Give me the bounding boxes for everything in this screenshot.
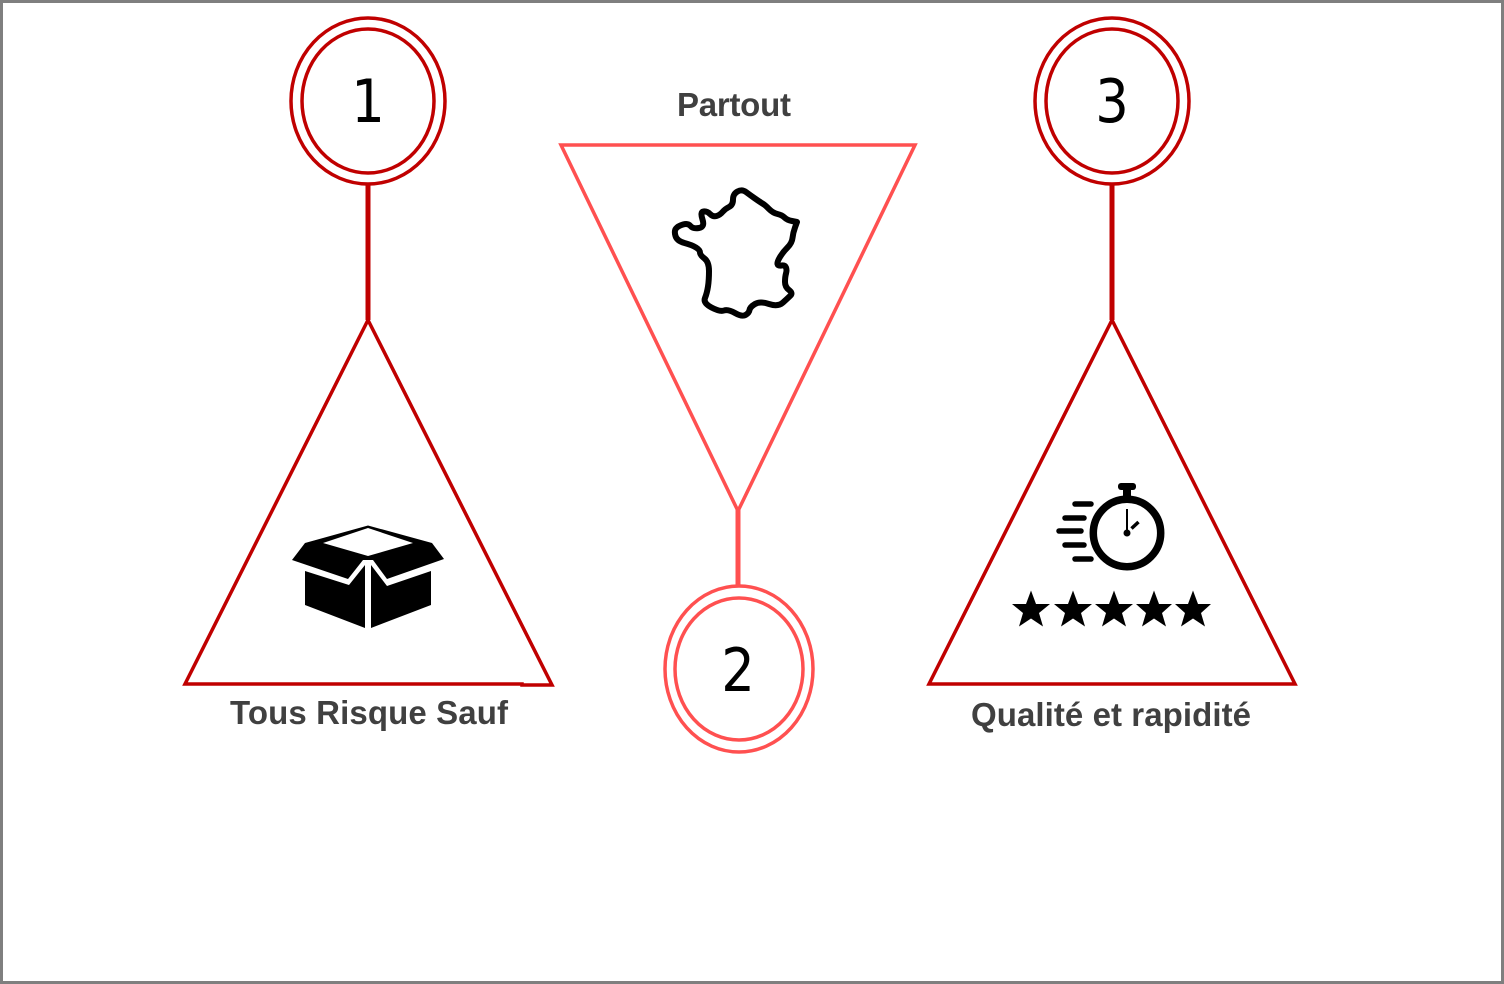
- icon: map of France: [675, 190, 797, 316]
- step 1 label: Tous Risque Sauf: [230, 694, 509, 731]
- panel: step 3: [929, 18, 1295, 733]
- step 2 connector: [736, 510, 740, 587]
- panel: step 2: [561, 86, 915, 752]
- icon: five stars: [1012, 590, 1211, 626]
- step 3 badge: [1035, 18, 1189, 184]
- icon: stopwatch: [1059, 483, 1161, 567]
- step 2 badge: 2: [721, 637, 755, 706]
- panel: step 1: [185, 18, 552, 731]
- step 1 badge: [291, 18, 445, 184]
- step 2 label: Partout: [677, 86, 791, 123]
- icon: open box: [292, 526, 444, 628]
- step 3 label: Qualité et rapidité: [971, 696, 1251, 733]
- step 1 triangle: [185, 320, 552, 685]
- step 3 connector: [1110, 184, 1114, 320]
- step 2 badge: [665, 586, 813, 752]
- step 3 badge: 3: [1095, 68, 1129, 137]
- step 3 triangle: [929, 320, 1295, 684]
- step 1 badge: 1: [351, 68, 385, 137]
- step 1 connector: [366, 184, 370, 320]
- step 2 triangle: [561, 145, 915, 511]
